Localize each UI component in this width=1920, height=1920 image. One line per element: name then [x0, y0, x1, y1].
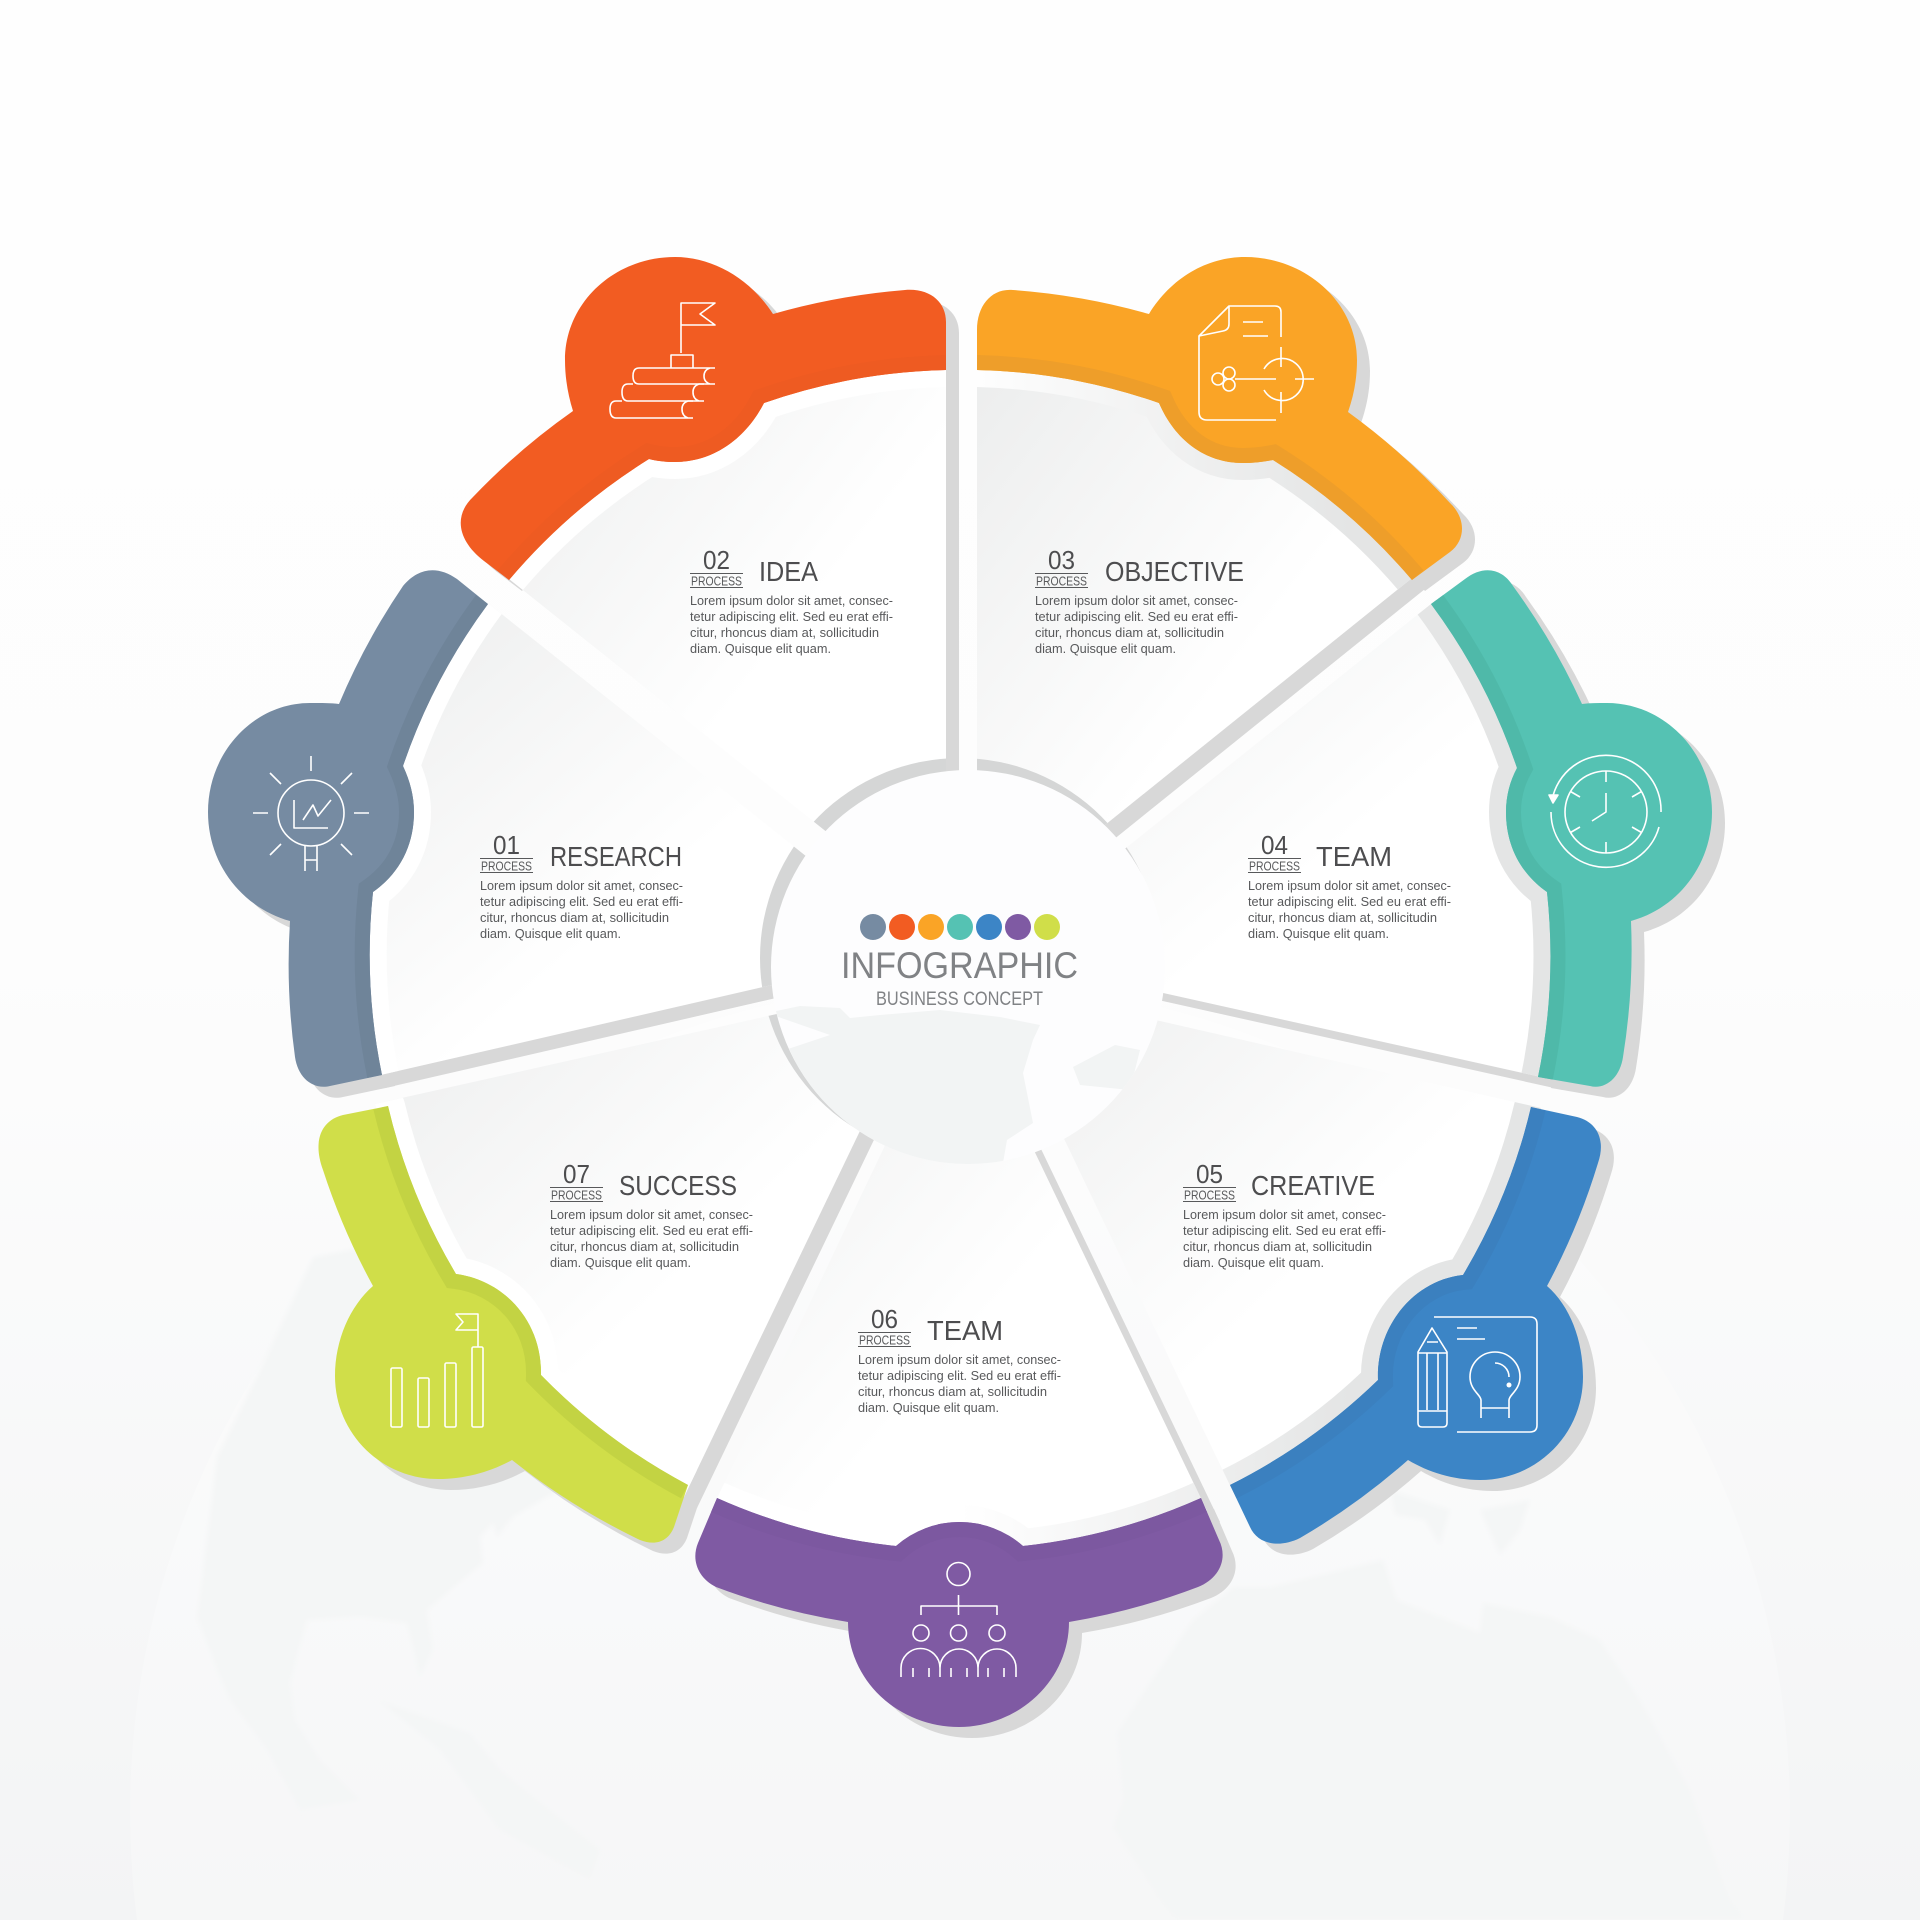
centre title: INFOGRAPHIC: [841, 945, 1078, 986]
band 03: yellow: [977, 257, 1462, 580]
band 07: lime: [318, 1106, 688, 1543]
icon: flag on books: [610, 303, 715, 418]
icon: clock: [1549, 755, 1661, 867]
text block 01 research: PROCESS: [481, 858, 532, 874]
text block 03 objective: tetur adipiscing elit. Sed eu erat effi-: [1035, 609, 1238, 624]
text block 04 team: 04: [1261, 830, 1288, 860]
text block 05 creative: diam. Quisque elit quam.: [1183, 1255, 1324, 1270]
text block 05 creative: Lorem ipsum dolor sit amet, consec-: [1183, 1207, 1386, 1222]
band 02: orange: [461, 257, 946, 580]
text block 06 team: TEAM: [927, 1315, 1003, 1346]
text block 06 team: Lorem ipsum dolor sit amet, consec-: [858, 1352, 1061, 1367]
text block 04 team: PROCESS: [1249, 858, 1300, 874]
text block 02 idea: Lorem ipsum dolor sit amet, consec-: [690, 593, 893, 608]
text block 01 research: tetur adipiscing elit. Sed eu erat effi-: [480, 894, 683, 909]
text block 06 team: tetur adipiscing elit. Sed eu erat effi-: [858, 1368, 1061, 1383]
text block 07 success: citur, rhoncus diam at, sollicitudin: [550, 1239, 739, 1254]
text block 04 team: tetur adipiscing elit. Sed eu erat effi-: [1248, 894, 1451, 909]
text block 06 team: [858, 1304, 1061, 1415]
text block 01 research: Lorem ipsum dolor sit amet, consec-: [480, 878, 683, 893]
text block 03 objective: OBJECTIVE: [1105, 556, 1244, 587]
text block 01 research: citur, rhoncus diam at, sollicitudin: [480, 910, 669, 925]
band 01: slate: [208, 570, 488, 1087]
icon: document with target: [1199, 306, 1314, 420]
centre colour dots: [860, 914, 1060, 940]
globe land inside disc: [776, 1006, 1140, 1164]
text block 07 success: diam. Quisque elit quam.: [550, 1255, 691, 1270]
text block 07 success: tetur adipiscing elit. Sed eu erat effi-: [550, 1223, 753, 1238]
icon: bulb with chart: [253, 756, 369, 871]
text block 01 research: diam. Quisque elit quam.: [480, 926, 621, 941]
band 05: blue: [1230, 1107, 1601, 1544]
text block 02 idea: diam. Quisque elit quam.: [690, 641, 831, 656]
text block 02 idea: 02: [703, 545, 730, 575]
text block 04 team: Lorem ipsum dolor sit amet, consec-: [1248, 878, 1451, 893]
text block 02 idea: PROCESS: [691, 574, 742, 588]
panel wedges: [361, 365, 1561, 1565]
text block 02 idea: tetur adipiscing elit. Sed eu erat effi-: [690, 609, 893, 624]
text block 05 creative: CREATIVE: [1251, 1170, 1375, 1201]
icon: bar chart with flag: [391, 1314, 483, 1427]
text block 02 idea: [690, 545, 893, 656]
text block 03 objective: 03: [1048, 545, 1075, 575]
halo around coloured bands: [373, 370, 1550, 1538]
centre subtitle: BUSINESS CONCEPT: [876, 989, 1043, 1010]
band 04: teal: [1431, 570, 1712, 1087]
text block 06 team: PROCESS: [859, 1332, 910, 1348]
text block 02 idea: IDEA: [759, 556, 818, 587]
centre disc: [771, 770, 1165, 1164]
text block 02 idea: citur, rhoncus diam at, sollicitudin: [690, 625, 879, 640]
text block 06 team: 06: [871, 1304, 898, 1334]
text block 04 team: [1248, 830, 1451, 941]
text block 07 success: 07: [563, 1159, 590, 1189]
background globe: [130, 982, 1790, 1920]
text block 03 objective: [1035, 545, 1244, 656]
text block 07 success: SUCCESS: [619, 1170, 737, 1201]
text block 01 research: RESEARCH: [550, 841, 682, 872]
text block 03 objective: PROCESS: [1036, 574, 1087, 588]
text block 04 team: diam. Quisque elit quam.: [1248, 926, 1389, 941]
drop shadows: [221, 268, 1725, 1738]
band 06: purple: [695, 1498, 1223, 1727]
text block 01 research: [480, 830, 683, 941]
text block 04 team: citur, rhoncus diam at, sollicitudin: [1248, 910, 1437, 925]
text block 07 success: Lorem ipsum dolor sit amet, consec-: [550, 1207, 753, 1222]
centre disc shadow: [760, 758, 1140, 1127]
text block 07 success: PROCESS: [551, 1188, 602, 1202]
text block 05 creative: tetur adipiscing elit. Sed eu erat effi-: [1183, 1223, 1386, 1238]
text block 03 objective: Lorem ipsum dolor sit amet, consec-: [1035, 593, 1238, 608]
text block 06 team: diam. Quisque elit quam.: [858, 1400, 999, 1415]
text block 06 team: citur, rhoncus diam at, sollicitudin: [858, 1384, 1047, 1399]
text block 07 success: [550, 1159, 753, 1270]
text block 04 team: TEAM: [1316, 841, 1392, 872]
text block 03 objective: citur, rhoncus diam at, sollicitudin: [1035, 625, 1224, 640]
text block 01 research: 01: [493, 830, 520, 860]
icon: pencil and idea board: [1418, 1317, 1537, 1432]
text block 05 creative: PROCESS: [1184, 1188, 1235, 1202]
text block 05 creative: citur, rhoncus diam at, sollicitudin: [1183, 1239, 1372, 1254]
text block 03 objective: diam. Quisque elit quam.: [1035, 641, 1176, 656]
icon: team hierarchy: [901, 1562, 1016, 1677]
text block 05 creative: [1183, 1159, 1386, 1270]
text block 05 creative: 05: [1196, 1159, 1223, 1189]
